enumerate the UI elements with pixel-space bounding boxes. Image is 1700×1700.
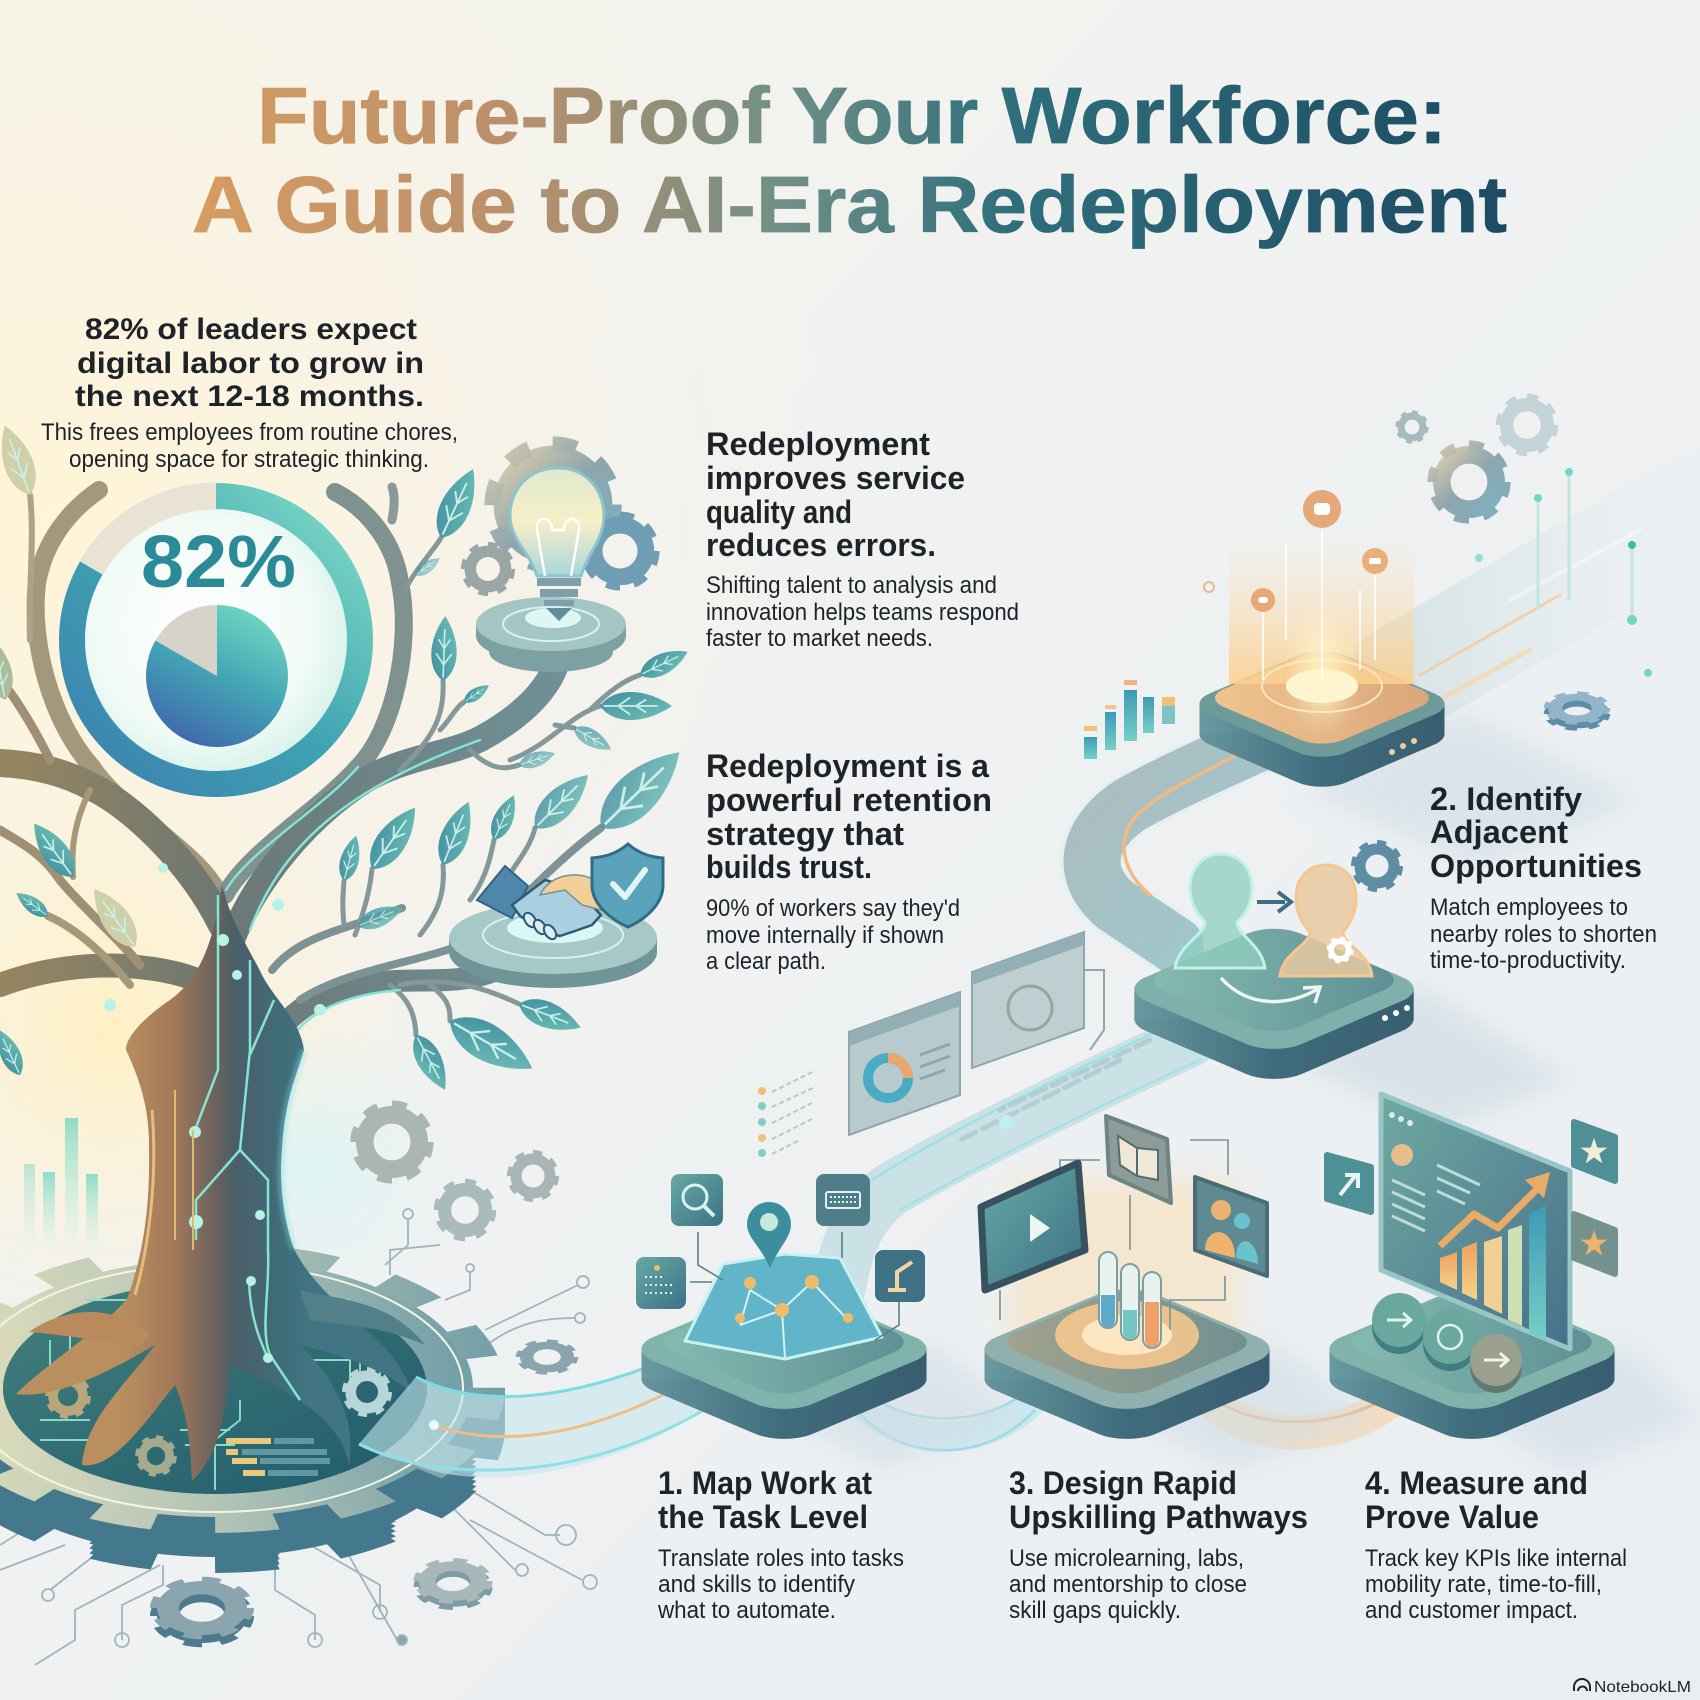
gauge ring	[72, 496, 360, 784]
title	[192, 71, 1507, 249]
leaves	[0, 421, 694, 1095]
text: step 2: time-to-productivity.	[1430, 947, 1626, 974]
NotebookLM logo: NotebookLM	[1594, 1679, 1691, 1696]
text: step 1	[657, 1465, 904, 1624]
text: retention: 90% of workers say they'd	[706, 895, 960, 922]
icon: star tile top	[1574, 1122, 1615, 1181]
text: step 2: Opportunities	[1430, 848, 1642, 884]
panel: gauge dashboard	[972, 932, 1104, 1068]
text: step 3: 3. Design Rapid	[1009, 1465, 1237, 1501]
statistic text block: This frees employees from routine chores,	[41, 419, 458, 446]
road: top platform to step 2	[1092, 740, 1265, 945]
dashboard panels	[758, 932, 1104, 1157]
link: step 1 to step 3	[855, 1382, 1035, 1450]
text: step 4: Track key KPIs like internal	[1365, 1545, 1627, 1572]
decorative nodes: top right	[1475, 468, 1652, 677]
text: step 4: and customer impact.	[1365, 1597, 1578, 1624]
icon: test tubes	[1099, 1252, 1161, 1348]
text: step 1: Translate roles into tasks	[658, 1545, 904, 1572]
text: step 1: the Task Level	[658, 1499, 868, 1535]
text: step 2: nearby roles to shorten	[1430, 921, 1657, 948]
chart: bars left of top platform	[1084, 680, 1175, 759]
step platform 1: map	[625, 1174, 1030, 1470]
trunk highlight	[281, 1050, 304, 1249]
title: A Guide to AI-Era Redeployment	[192, 160, 1507, 249]
road: step 2 to step 1	[838, 1018, 1200, 1290]
step platform: top orange	[1185, 490, 1640, 870]
list dots	[758, 1072, 815, 1157]
person right	[1280, 865, 1372, 976]
text: service quality: faster to market needs.	[706, 625, 933, 652]
bar chart: left background	[24, 1118, 98, 1250]
text: retention: Redeployment is a	[706, 748, 989, 784]
text: step 4: mobility rate, time-to-fill,	[1365, 1571, 1602, 1598]
arrow between people	[1257, 892, 1291, 912]
icon: people tile	[1195, 1177, 1267, 1276]
statistic text block: 82% of leaders expect	[85, 313, 417, 346]
text: service quality: innovation helps teams respond	[706, 599, 1019, 626]
text: service quality	[706, 426, 1019, 652]
text: step 2: 2. Identify	[1430, 781, 1582, 817]
text: step 4: 4. Measure and	[1365, 1465, 1588, 1501]
curved arrow	[1221, 978, 1320, 1003]
text: service quality: quality and	[706, 494, 852, 530]
icon: keyboard tile	[816, 1174, 870, 1226]
title: Future-Proof Your Workforce:	[257, 71, 1447, 160]
statistic text block: opening space for strategic thinking.	[69, 446, 429, 473]
statistic text block: the next 12-18 months.	[75, 380, 424, 413]
text: retention: strategy that	[706, 816, 904, 852]
icon: light bulb with gears on platform	[464, 444, 655, 672]
tree branches	[0, 487, 640, 1060]
text: step 1: what to automate.	[657, 1597, 836, 1624]
text: retention: powerful retention	[706, 782, 992, 818]
big gear base	[0, 863, 487, 1564]
text: step 4: Prove Value	[1365, 1499, 1539, 1535]
text: step 3: skill gaps quickly.	[1009, 1597, 1181, 1624]
text: retention: move internally if shown	[706, 922, 944, 949]
pie chart	[146, 605, 288, 747]
text: service quality: reduces errors.	[706, 527, 936, 563]
links between steps	[855, 1382, 1398, 1450]
step platform 3: learning	[968, 1116, 1380, 1470]
icon: magnifier tile	[671, 1174, 723, 1226]
map pin	[747, 1202, 791, 1268]
icon: robot arm tile	[875, 1250, 925, 1302]
text: retention: builds trust.	[706, 849, 872, 885]
text: step 2: Adjacent	[1430, 814, 1568, 850]
text: retention	[706, 748, 992, 975]
icon: star tile bottom	[1574, 1214, 1615, 1274]
statistic text block: digital labor to grow in	[77, 347, 424, 380]
icon: video tablet	[981, 1163, 1085, 1290]
link: step 3 to step 4	[1205, 1390, 1398, 1432]
text: step 2	[1430, 781, 1657, 974]
step platform 2: people	[1118, 843, 1570, 1130]
road: far upper right	[1400, 505, 1700, 705]
step platform 4: metrics	[1313, 1094, 1700, 1470]
gear beside people	[1354, 843, 1400, 889]
text: step 3: Upskilling Pathways	[1009, 1499, 1308, 1535]
icon: bottom gears	[156, 1561, 488, 1644]
text: service quality: Shifting talent to analysis and	[706, 572, 997, 599]
map	[685, 1254, 882, 1359]
gears: top right cluster	[1397, 397, 1606, 729]
control buttons	[1372, 1293, 1522, 1393]
statistic text block	[41, 313, 458, 473]
trunk circuit traces	[104, 863, 326, 1400]
text: step 2: Match employees to	[1430, 894, 1628, 921]
text: service quality: Redeployment	[706, 426, 930, 462]
trunk and roots	[16, 885, 412, 1481]
icon: arrow tile	[1327, 1155, 1371, 1212]
circuit lines	[0, 1209, 597, 1665]
top floating orbs	[1204, 490, 1388, 612]
gauge: 82%	[72, 496, 360, 784]
text: step 1: and skills to identify	[658, 1571, 855, 1598]
text: step 3: Use microlearning, labs,	[1009, 1545, 1244, 1572]
gauge value: 82%	[141, 520, 296, 603]
flow ribbon: gear to step 1	[359, 1345, 720, 1477]
text: step 4	[1365, 1465, 1627, 1624]
person left	[1175, 854, 1265, 968]
gears: floating near tree	[355, 1105, 575, 1373]
icon: handshake and shield on platform	[449, 844, 663, 988]
text: step 3	[1009, 1465, 1308, 1624]
text: step 1: 1. Map Work at	[658, 1465, 872, 1501]
connectors	[690, 1232, 899, 1340]
gauge remainder arc	[91, 496, 216, 568]
text: retention: a clear path.	[706, 948, 826, 975]
text: service quality: improves service	[706, 460, 965, 496]
icon: task tile	[636, 1257, 686, 1309]
panel: donut dashboard	[849, 992, 960, 1135]
icon: book tile	[1106, 1116, 1171, 1203]
screen with chart	[1381, 1094, 1570, 1349]
circuit board interior	[40, 1300, 389, 1490]
text: step 3: and mentorship to close	[1009, 1571, 1247, 1598]
